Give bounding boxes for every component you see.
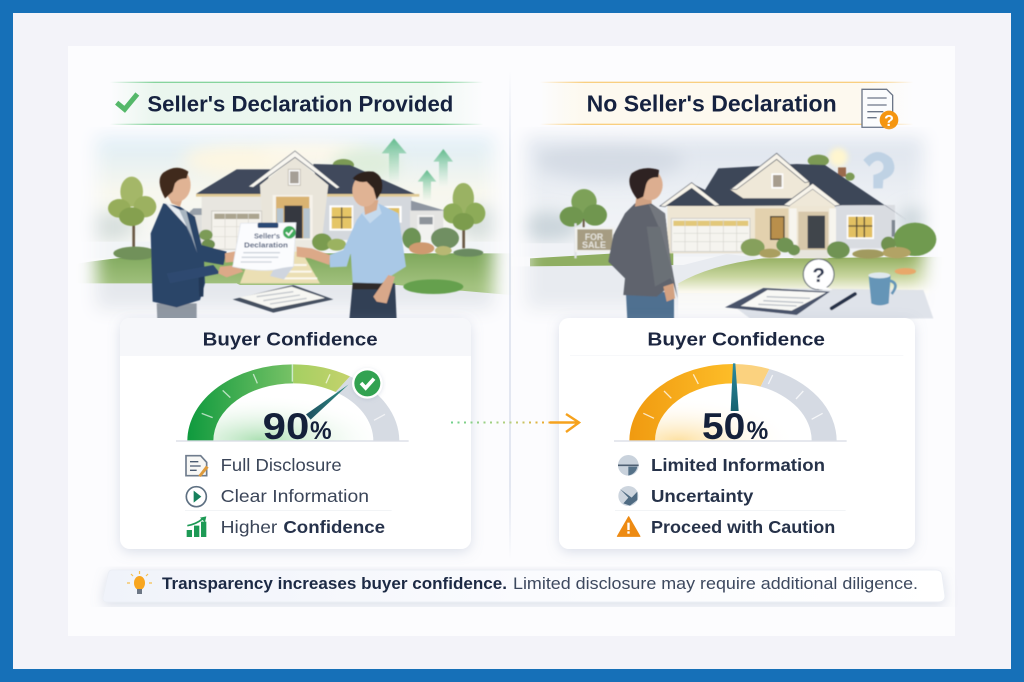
icon: light bulb xyxy=(127,571,152,594)
panel: seller's declaration provided xyxy=(60,82,530,549)
house xyxy=(660,153,907,258)
item: higher confidence: Confidence xyxy=(283,517,385,537)
clipboard with question bubble xyxy=(725,259,855,315)
heading: seller's declaration provided xyxy=(110,82,483,125)
gauge: 50%: % xyxy=(747,417,768,445)
bushes xyxy=(113,228,483,294)
green upward arrows xyxy=(382,138,453,202)
document: seller's declaration: Seller's xyxy=(254,231,280,240)
man: buyer in blue shirt xyxy=(297,171,406,320)
takeaway text: Transparency increases buyer confidence. xyxy=(162,574,507,593)
item: full disclosure: Full Disclosure xyxy=(221,455,342,475)
icon: document with question mark xyxy=(862,89,898,130)
panel: no seller's declaration xyxy=(520,82,937,556)
gauge: 90% xyxy=(176,364,409,447)
trees xyxy=(108,159,485,248)
item: proceed with caution: Proceed with Caution xyxy=(651,517,835,537)
for sale sign xyxy=(574,223,614,258)
gauge: 90%: % xyxy=(310,417,332,445)
coffee mug xyxy=(868,272,895,305)
icon: document with question mark: ? xyxy=(884,113,894,130)
card heading: Buyer Confidence xyxy=(647,329,825,350)
bushes xyxy=(741,223,936,275)
clipboard with question bubble: ? xyxy=(812,264,825,287)
item: higher confidence: Higher xyxy=(221,517,277,537)
arrow: dotted connector xyxy=(451,414,579,432)
item: full disclosure xyxy=(186,455,342,477)
illustration: agent handing declaration to buyer in front of house xyxy=(84,132,507,318)
gauge: 50% xyxy=(614,363,847,447)
banner: key takeaway xyxy=(103,570,945,602)
illustration: buyer looking at house with for sale sign xyxy=(520,126,937,319)
card: buyer confidence, right xyxy=(559,318,915,549)
document: seller's declaration: Declaration xyxy=(244,240,288,249)
document: seller's declaration xyxy=(233,223,296,279)
item: higher confidence xyxy=(187,516,385,537)
item: uncertainty: Uncertainty xyxy=(651,486,753,506)
heading: seller's declaration provided: Seller's Declaration Provided xyxy=(147,91,453,116)
item: clear information: Clear Information xyxy=(221,486,369,506)
for sale sign: FOR xyxy=(585,232,604,242)
man: buyer from behind in grey jacket xyxy=(608,168,678,320)
heading: no seller's declaration: No Seller's Declaration xyxy=(587,90,837,116)
card: buyer confidence, left xyxy=(120,318,471,549)
takeaway text: Limited disclosure may require additional diligence. xyxy=(513,574,918,593)
walkway xyxy=(240,252,320,283)
tabletop xyxy=(730,288,933,318)
gauge: 50%: 50 xyxy=(702,406,745,447)
man: agent in navy suit xyxy=(151,168,243,320)
for sale sign: SALE xyxy=(582,240,606,250)
clipboard on pavement xyxy=(233,285,333,313)
heading: no seller's declaration xyxy=(540,82,913,130)
card heading: Buyer Confidence xyxy=(203,329,378,350)
gauge: 90%: 90 xyxy=(263,406,309,447)
faded question mark xyxy=(863,152,894,188)
inner white panel xyxy=(68,46,955,636)
item: limited information: Limited Information xyxy=(651,455,825,475)
tree and sun glow xyxy=(560,148,855,235)
house xyxy=(187,151,445,252)
